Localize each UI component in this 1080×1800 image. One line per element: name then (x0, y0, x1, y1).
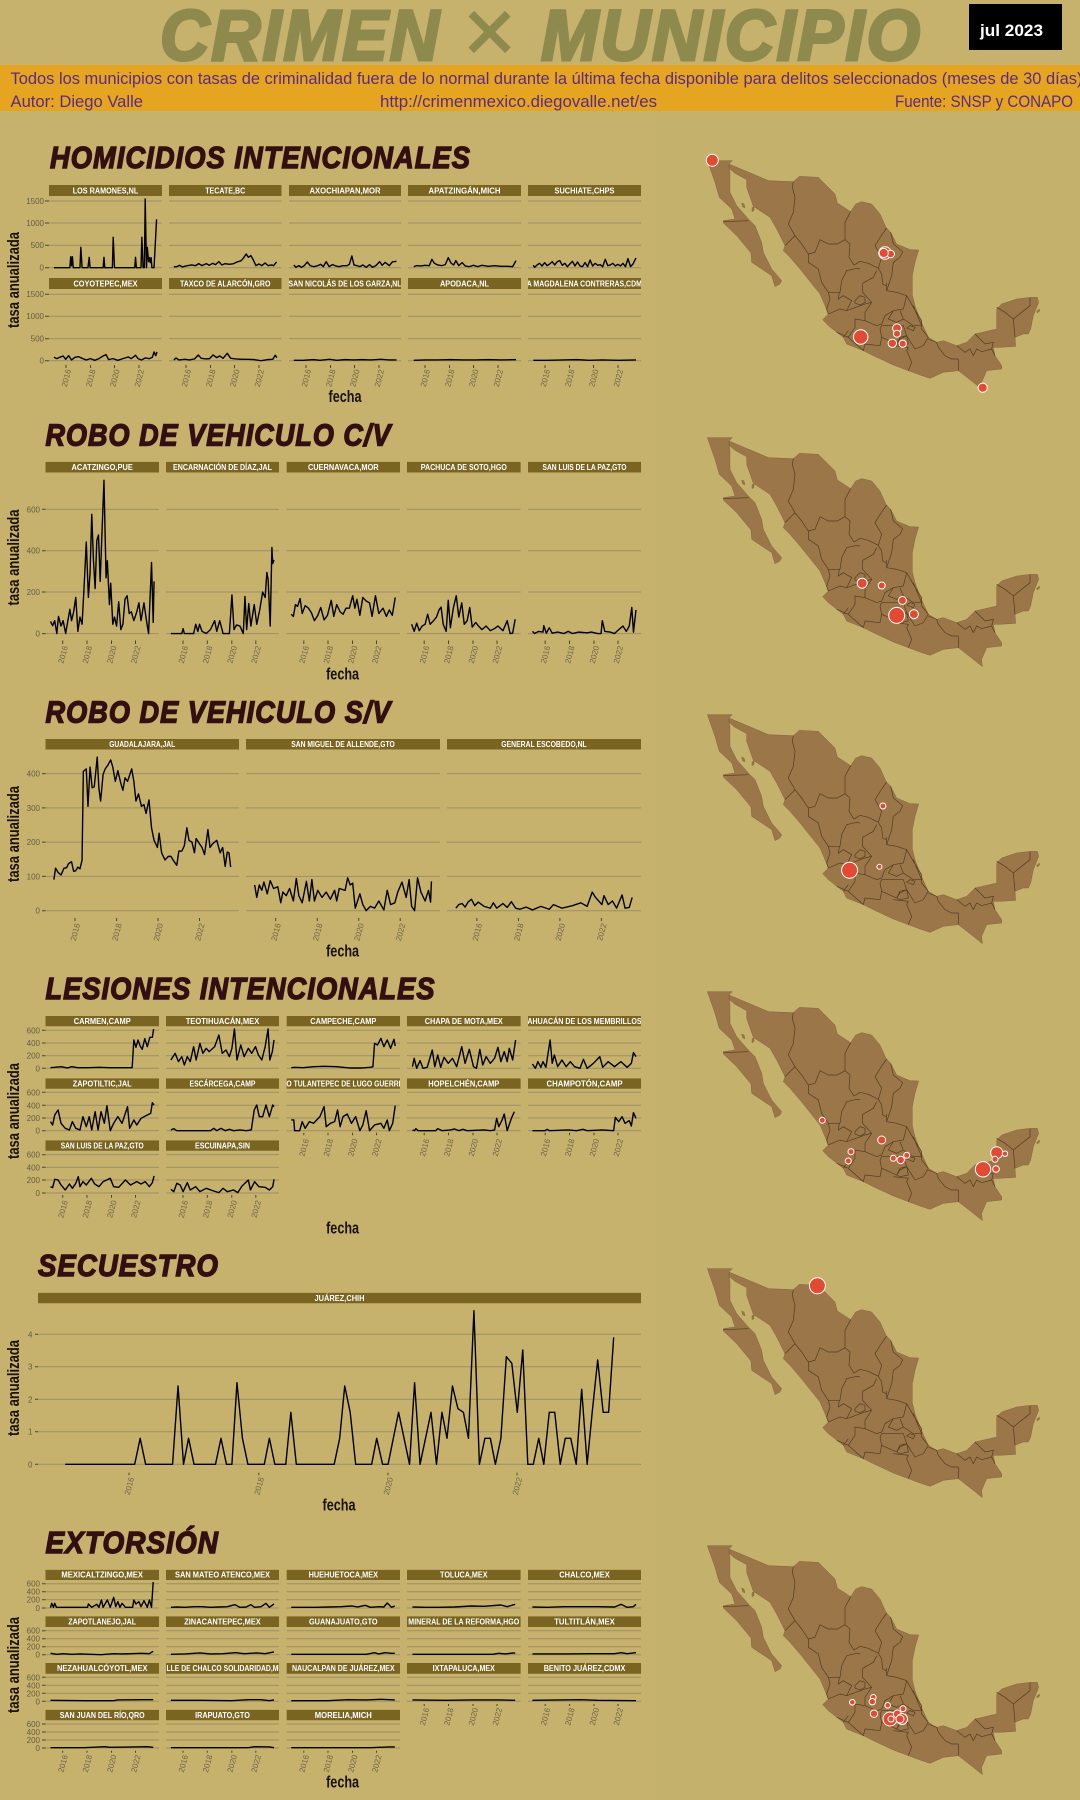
section: homicidios intencionales (4, 140, 1040, 406)
section: secuestro (4, 1248, 1040, 1515)
panel: Hopelchén (407, 1078, 521, 1157)
panel: Mexicaltzingo (46, 1570, 160, 1608)
panel: Hopelchén: 2018 (442, 1137, 456, 1157)
section: robo de vehiculo c/v (4, 418, 1040, 684)
panel: Taxco de Alarcón: 2016 (180, 368, 193, 388)
panel: Apatzingán: APATZINGÁN,MICH (428, 186, 501, 195)
panel: Acatzingo (46, 462, 160, 664)
map: robo c/v (707, 438, 1040, 667)
panel: Toluca (407, 1570, 521, 1608)
panel: Apatzingán (408, 185, 521, 268)
panel: Carmen (46, 1016, 160, 1068)
panel: General Escobedo: 2018 (512, 922, 526, 942)
y axis labels: 400 (27, 1681, 41, 1690)
panel: San Juan del Río: 2022 (129, 1753, 143, 1773)
panel: Escuinapa: 2016 (177, 1199, 190, 1219)
map: robo s/v (707, 715, 1040, 944)
panel: Coyotepec: 2016 (60, 368, 73, 388)
panel: La Magdalena Contreras: 2016 (539, 368, 552, 388)
panel: Teotihuacán (166, 1016, 280, 1068)
y axis labels: 500 (31, 241, 45, 250)
panel: Zapotlanejo: ZAPOTLANEJO,JAL (68, 1618, 136, 1627)
subtitle band (0, 65, 1080, 111)
panel: Valle de Chalco Solidaridad (158, 1663, 288, 1701)
panel: Toluca: TOLUCA,MEX (440, 1571, 488, 1580)
panel: Taxco de Alarcón (169, 278, 282, 388)
panel: Cuernavaca: CUERNAVACA,MOR (308, 463, 379, 472)
panel: Escuinapa: ESCUINAPA,SIN (195, 1141, 250, 1150)
panel: San Luis de la Paz (528, 462, 642, 664)
x axis title: fecha (326, 1773, 359, 1792)
panel: Guadalajara (46, 739, 240, 942)
panel: Irapuato (166, 1710, 280, 1773)
panel: Champotón: 2016 (539, 1137, 552, 1157)
y axis labels: 0 (36, 630, 41, 638)
panel: Apodaca: APODACA,NL (440, 279, 489, 288)
panel: Axochiapan (289, 185, 402, 268)
panel: Coyotepec (49, 278, 162, 388)
y axis labels: 0 (36, 907, 41, 916)
panel: Carmen: CARMEN,CAMP (74, 1017, 131, 1026)
panel: Hopelchén: 2022 (491, 1137, 504, 1157)
y axis labels: 0 (40, 356, 45, 366)
x axis title: fecha (322, 1496, 356, 1515)
panel: Cuernavaca: 2018 (322, 644, 335, 664)
panel: Irapuato: 2018 (201, 1753, 215, 1773)
panel: Guadalajara: 2016 (69, 922, 82, 942)
panel: General Escobedo: 2020 (554, 922, 567, 942)
y axis labels: 600 (27, 1088, 41, 1097)
panel: Morelia: 2018 (322, 1753, 335, 1773)
panel: Tecate (169, 185, 282, 268)
y axis labels: 600 (27, 1026, 41, 1035)
panel: Naucalpan de Juárez (287, 1663, 401, 1701)
panel: Encarnación de Díaz: 2016 (177, 644, 190, 664)
section: lesiones intencionales (4, 971, 1040, 1237)
panel: Irapuato: 2022 (250, 1753, 263, 1773)
panel: San Nicolás de los Garza (288, 278, 402, 388)
map: extorsión (707, 1546, 1040, 1775)
y axis labels: 600 (27, 505, 41, 514)
panel: Tultitlán: TULTITLÁN,MEX (554, 1618, 615, 1627)
panel: Taxco de Alarcón: 2022 (253, 368, 266, 388)
panel: General Escobedo: 2016 (471, 922, 484, 942)
y axis labels (27, 505, 46, 638)
panel: Juárez: 2016 (123, 1476, 136, 1496)
y axis labels (26, 197, 49, 366)
panel: Zapotiltic (46, 1078, 160, 1131)
panel: General Escobedo: GENERAL ESCOBEDO,NL (501, 740, 587, 749)
panel: Apodaca (408, 278, 521, 388)
panel: Hopelchén: 2020 (467, 1137, 480, 1157)
panel: Los Ramones (49, 185, 162, 268)
panel: San Nicolás de los Garza: 2020 (348, 368, 362, 388)
panel: Taxco de Alarcón: 2018 (204, 368, 218, 388)
panel: La Magdalena Contreras (522, 278, 647, 388)
panel: Acatzingo: ACATZINGO,PUE (72, 463, 134, 472)
panel: Escuinapa: 2018 (201, 1199, 215, 1219)
y axis labels: 400 (27, 1588, 41, 1597)
y axis title: tasa anualizada (4, 1340, 23, 1436)
panel: Irapuato: 2016 (177, 1753, 190, 1773)
panel: Benito Juárez: 2018 (563, 1706, 577, 1726)
map: secuestro (707, 1269, 1040, 1498)
panel: San Luis de la Paz (46, 1140, 160, 1219)
panel: Encarnación de Díaz: 2020 (226, 644, 239, 664)
panel: Escuinapa: 2022 (250, 1199, 263, 1219)
panel: Ixtapaluca: IXTAPALUCA,MEX (433, 1664, 496, 1673)
panel: San Luis de la Paz: SAN LUIS DE LA PAZ,GTO (542, 463, 626, 472)
y axis labels: 400 (27, 1101, 41, 1110)
y axis labels: 1500 (26, 197, 45, 206)
panel: Morelia: MORELIA,MICH (315, 1711, 372, 1720)
y axis labels: 2 (28, 1395, 33, 1404)
panel: Benito Juárez (528, 1663, 642, 1726)
panel: Hopelchén: HOPELCHÉN,CAMP (428, 1079, 500, 1088)
y axis labels: 400 (27, 770, 41, 779)
panel: San Luis de la Paz: 2022 (129, 1199, 143, 1219)
subtitle band: Autor: Diego Valle (10, 92, 143, 111)
y axis labels: 600 (27, 1627, 41, 1636)
panel: Chapa de Mota (407, 1016, 521, 1068)
panel: Guadalajara: 2018 (110, 922, 124, 942)
panel: Teotihuacán: TEOTIHUACÁN,MEX (186, 1017, 260, 1026)
panel: Juárez: 2022 (511, 1476, 524, 1496)
y axis labels: 200 (27, 1736, 41, 1745)
title (160, 0, 922, 82)
panel: Campeche: CAMPECHE,CAMP (310, 1017, 377, 1026)
panel: Escárcega: ESCÁRCEGA,CAMP (190, 1079, 256, 1088)
panel: Tecate: TECATE,BC (205, 186, 245, 195)
y axis labels: 0 (36, 1064, 41, 1073)
panel: Morelia (287, 1710, 401, 1773)
panel: Acatzingo: 2022 (129, 644, 143, 664)
y axis labels: 600 (27, 1720, 41, 1729)
panel: Acatzingo: 2016 (57, 644, 70, 664)
panel: Mineral de la Reforma (407, 1616, 521, 1655)
panel: Acatzingo: 2020 (105, 644, 119, 664)
panel: Champotón: CHAMPOTÓN,CAMP (546, 1079, 623, 1088)
panel: San Juan del Río: SAN JUAN DEL RÍO,QRO (60, 1711, 145, 1720)
y axis labels: 600 (27, 1580, 41, 1589)
x axis title: fecha (326, 1218, 359, 1237)
panel: Escuinapa: 2020 (226, 1199, 239, 1219)
panel: San Miguel de Allende (246, 739, 440, 942)
panel: General Escobedo: 2022 (595, 922, 609, 942)
panel: Champotón: 2022 (612, 1137, 625, 1157)
panel: Apodaca: 2022 (492, 368, 505, 388)
panel: San Luis de la Paz: SAN LUIS DE LA PAZ,GTO (61, 1141, 144, 1150)
panel: Pachuca de Soto: 2022 (491, 644, 504, 664)
y axis labels: 100 (27, 872, 41, 881)
panel: San Luis de la Paz: 2016 (57, 1199, 70, 1219)
panel: Pachuca de Soto: PACHUCA DE SOTO,HGO (421, 463, 507, 472)
panel: San Nicolás de los Garza: 2018 (324, 368, 338, 388)
heading: HOMICIDIOS INTENCIONALES (50, 140, 471, 175)
y axis labels (27, 1026, 46, 1198)
panel: Morelia: 2020 (346, 1753, 360, 1773)
panel: Pachuca de Soto (407, 462, 521, 664)
panel: Huehuetoca (287, 1570, 401, 1608)
panel: General Escobedo (447, 739, 641, 942)
y axis labels: 200 (27, 1689, 41, 1698)
y axis labels: 0 (36, 1697, 41, 1706)
y axis labels: 600 (27, 1673, 41, 1682)
panel: Pachuca de Soto: 2018 (442, 644, 456, 664)
panel: Ixtlahuacán de los Membrillos (512, 1016, 657, 1068)
panel: San Miguel de Allende: 2018 (311, 922, 325, 942)
y axis title: tasa anualizada (4, 509, 23, 606)
x axis title: fecha (326, 941, 359, 960)
y axis labels: 1000 (26, 312, 45, 321)
y axis labels: 0 (36, 1744, 41, 1753)
heading: ROBO DE VEHICULO C/V (46, 418, 392, 453)
panel: Irapuato: 2020 (226, 1753, 239, 1773)
y axis labels: 200 (27, 588, 41, 597)
y axis labels: 400 (27, 1635, 41, 1644)
heading: SECUESTRO (38, 1248, 219, 1283)
panel: Zapotlanejo (46, 1616, 160, 1655)
x axis title: fecha (328, 387, 362, 406)
date badge: jul 2023 (979, 21, 1043, 40)
panel: San Mateo Atenco: SAN MATEO ATENCO,MEX (175, 1571, 271, 1580)
panel: San Miguel de Allende: SAN MIGUEL DE ALLENDE,GTO (291, 740, 395, 749)
y axis title: tasa anualizada (4, 232, 23, 328)
panel: Encarnación de Díaz: 2018 (201, 644, 215, 664)
panel: Irapuato: IRAPUATO,GTO (195, 1711, 250, 1720)
panel: Apodaca: 2020 (467, 368, 481, 388)
panel: Morelia: 2016 (298, 1753, 311, 1773)
y axis labels: 200 (27, 1643, 41, 1652)
y axis labels: 200 (27, 1176, 41, 1185)
y axis title: tasa anualizada (4, 1617, 23, 1713)
panel: Chapa de Mota: CHAPA DE MOTA,MEX (425, 1017, 503, 1026)
panel: Guanajuato (287, 1616, 401, 1655)
y axis labels: 1500 (26, 290, 45, 299)
panel: San Luis de la Paz: 2022 (612, 644, 625, 664)
panel: Encarnación de Díaz (166, 462, 280, 664)
panel: Cuernavaca: 2022 (370, 644, 384, 664)
panel: Juárez: JUÁREZ,CHIH (314, 1294, 365, 1303)
panel: Pachuca de Soto: 2016 (418, 644, 431, 664)
panel: Zapotiltic: ZAPOTILTIC,JAL (73, 1079, 132, 1088)
panel: Coyotepec: 2018 (84, 368, 98, 388)
panel: Ixtapaluca: 2016 (418, 1706, 431, 1726)
panel: Zinacantepec (166, 1616, 280, 1655)
panel: Juárez: 2018 (253, 1476, 266, 1496)
panel: Ixtapaluca: 2018 (442, 1706, 456, 1726)
y axis labels: 400 (27, 1728, 41, 1737)
y axis labels: 600 (27, 1151, 41, 1160)
panel: San Nicolás de los Garza: 2022 (373, 368, 386, 388)
panel: San Luis de la Paz: 2018 (563, 644, 577, 664)
panel: La Magdalena Contreras: 2018 (563, 368, 577, 388)
panel: Champotón (528, 1078, 642, 1157)
panel: San Luis de la Paz: 2020 (105, 1199, 119, 1219)
panel: San Nicolás de los Garza: 2016 (300, 368, 313, 388)
panel: Chalco (528, 1570, 642, 1608)
subtitle band: http://crimenmexico.diegovalle.net/es (380, 92, 657, 111)
map: lesiones (707, 992, 1040, 1221)
panel: Cuernavaca: 2020 (346, 644, 360, 664)
panel: Santiago Tulantepec: 2020 (346, 1137, 360, 1157)
y axis labels (27, 770, 46, 916)
panel: Santiago Tulantepec: 2018 (322, 1137, 335, 1157)
y axis labels: 400 (27, 1163, 41, 1172)
panel: Ixtapaluca: 2020 (467, 1706, 480, 1726)
panel: Ixtapaluca: 2022 (491, 1706, 504, 1726)
y axis labels: 200 (27, 1052, 41, 1061)
y axis labels: 0 (36, 1604, 41, 1613)
section: robo de vehiculo s/v (4, 694, 1040, 960)
x axis title: fecha (326, 665, 359, 684)
y axis labels: 400 (27, 1039, 41, 1048)
panel: San Mateo Atenco (166, 1570, 280, 1608)
panel: San Miguel de Allende: 2016 (270, 922, 283, 942)
panel: Champotón: 2018 (563, 1137, 577, 1157)
panel: Hopelchén: 2016 (418, 1137, 431, 1157)
panel: San Juan del Río: 2018 (81, 1753, 94, 1773)
panel: Juárez (38, 1293, 641, 1496)
panel: San Miguel de Allende: 2020 (353, 922, 366, 942)
panel: San Luis de la Paz: 2018 (81, 1199, 94, 1219)
panel: Los Ramones: LOS RAMONES,NL (73, 186, 138, 195)
panel: Pachuca de Soto: 2020 (467, 644, 480, 664)
panel: Zinacantepec: ZINACANTEPEC,MEX (184, 1618, 261, 1627)
panel: Coyotepec: 2022 (133, 368, 146, 388)
panel: Escuinapa (166, 1140, 280, 1219)
panel: Santiago Tulantepec: 2016 (298, 1137, 311, 1157)
panel: Guanajuato: GUANAJUATO,GTO (309, 1618, 378, 1627)
y axis labels: 500 (31, 334, 45, 344)
panel: Apodaca: 2018 (443, 368, 457, 388)
panel: Apodaca: 2016 (419, 368, 432, 388)
panel: Escárcega (166, 1078, 280, 1131)
panel: Benito Juárez: 2022 (612, 1706, 625, 1726)
y axis labels: 0 (28, 1460, 33, 1469)
panel: La Magdalena Contreras: 2022 (612, 368, 625, 388)
map: homicidios (706, 154, 1040, 392)
panel: Guadalajara: 2020 (152, 922, 165, 942)
y axis title: tasa anualizada (4, 786, 23, 882)
y axis labels: 200 (27, 1114, 41, 1123)
y axis labels: 3 (28, 1363, 33, 1372)
y axis labels: 0 (36, 1189, 41, 1198)
panel: Taxco de Alarcón: 2020 (228, 368, 242, 388)
panel: Cuernavaca (287, 462, 401, 664)
heading: LESIONES INTENCIONALES (46, 971, 436, 1006)
y axis labels: 0 (36, 1651, 41, 1660)
panel: Morelia: 2022 (370, 1753, 384, 1773)
y axis labels: 200 (27, 838, 41, 847)
y axis labels: 0 (40, 264, 45, 272)
heading: EXTORSIÓN (46, 1525, 219, 1560)
panel: Campeche (287, 1016, 401, 1068)
y axis labels: 300 (27, 804, 41, 813)
panel: Guadalajara: 2022 (193, 922, 207, 942)
panel: San Juan del Río (46, 1710, 160, 1773)
panel: Nezahualcóyotl (46, 1663, 160, 1701)
panel: Taxco de Alarcón: TAXCO DE ALARCÓN,GRO (180, 279, 270, 288)
y axis labels: 0 (36, 1127, 41, 1136)
panel: La Magdalena Contreras: 2020 (587, 368, 601, 388)
panel: Nezahualcóyotl: NEZAHUALCÓYOTL,MEX (57, 1664, 148, 1673)
y axis labels: 400 (27, 547, 41, 556)
panel: San Juan del Río: 2020 (105, 1753, 119, 1773)
panel: Santiago Tulantepec: 2022 (370, 1137, 384, 1157)
panel: San Luis de la Paz: 2016 (539, 644, 552, 664)
panel: San Miguel de Allende: 2022 (394, 922, 407, 942)
section: extorsión (4, 1525, 1040, 1792)
y axis title: tasa anualizada (4, 1063, 23, 1159)
y axis labels: 200 (27, 1596, 41, 1605)
y axis labels: 4 (28, 1330, 33, 1339)
heading: ROBO DE VEHICULO S/V (46, 694, 392, 730)
panel: Benito Juárez: BENITO JUÁREZ,CDMX (544, 1664, 626, 1673)
panel: Huehuetoca: HUEHUETOCA,MEX (309, 1571, 379, 1580)
panel: Guadalajara: GUADALAJARA,JAL (109, 740, 175, 749)
panel: Acatzingo: 2018 (81, 644, 94, 664)
panel: Chalco: CHALCO,MEX (559, 1571, 610, 1580)
panel: Santiago Tulantepec (256, 1078, 431, 1157)
y axis labels: 1 (28, 1428, 33, 1437)
panel: Axochiapan: AXOCHIAPAN,MOR (310, 186, 381, 195)
panel: Suchiate (528, 185, 641, 268)
panel: Champotón: 2020 (588, 1137, 601, 1157)
panel: Ixtapaluca (407, 1663, 521, 1726)
panel: Cuernavaca: 2016 (298, 644, 311, 664)
date badge (969, 4, 1062, 50)
panel: San Juan del Río: 2016 (57, 1753, 70, 1773)
panel: Juárez: 2020 (382, 1476, 395, 1496)
panel: Encarnación de Díaz: 2022 (250, 644, 263, 664)
panel: Coyotepec: COYOTEPEC,MEX (74, 279, 138, 288)
panel: Suchiate: SUCHIATE,CHPS (554, 186, 615, 195)
panel: Benito Juárez: 2020 (588, 1706, 601, 1726)
panel: Benito Juárez: 2016 (539, 1706, 552, 1726)
panel: Coyotepec: 2020 (108, 368, 122, 388)
y axis labels: 1000 (26, 219, 45, 228)
y axis labels (27, 1580, 46, 1753)
panel: Mexicaltzingo: MEXICALTZINGO,MEX (61, 1571, 144, 1580)
panel: Tultitlán (528, 1616, 642, 1655)
panel: San Luis de la Paz: 2020 (588, 644, 601, 664)
y axis labels (28, 1330, 38, 1469)
